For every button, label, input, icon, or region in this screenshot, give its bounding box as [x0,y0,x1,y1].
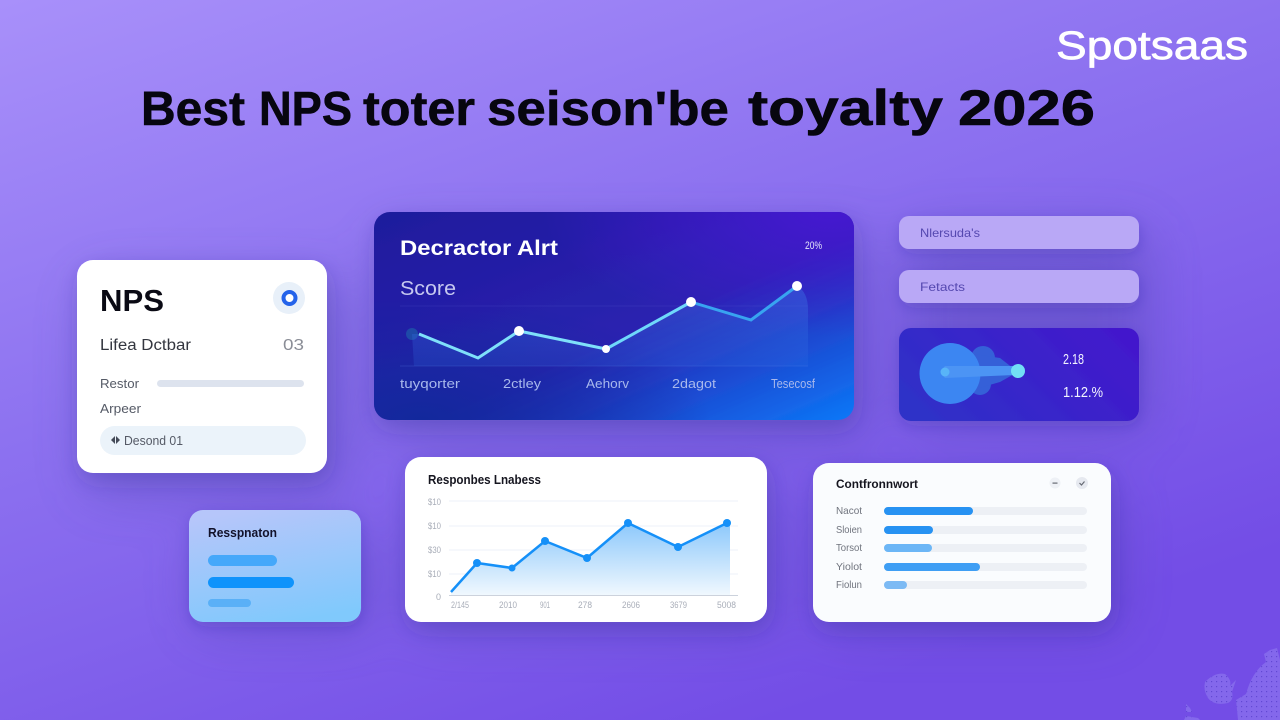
title: toyalty [748,80,943,136]
bar 3 [208,599,251,607]
row: Nacot: Nacot [836,505,862,517]
panel: Contfronnwort bars [813,463,1111,622]
panel: Resspnaton card [189,510,361,622]
line chart: score [406,281,808,366]
row: Nacot [836,505,1087,517]
row: Fiolun: Fiolun [836,579,862,591]
row: Yiolot: Yiolot [836,561,862,573]
x axis labels: 2ctley [503,377,542,391]
title: NPS [259,83,352,136]
x axis labels: 5008 [717,600,736,610]
title: toter [363,83,475,136]
icon: target ring [273,282,305,314]
row bar [157,380,304,387]
icon: minus [1050,478,1060,488]
title: 2026 [958,80,1095,136]
logo: Spotsaas: Spotsaas [1056,24,1248,68]
row: Sloien: Sloien [836,524,862,536]
area line chart [449,519,738,596]
x axis labels: Aehorv [586,377,630,391]
x axis labels: Tesecosf [771,377,815,391]
stat 2: 1.12.% [1063,384,1103,401]
y axis labels: $10 [428,521,441,531]
pill: Desond 01 [100,426,306,455]
row: Fiolun [836,579,1087,591]
x axis labels: 2dagot [672,377,717,391]
row label: Restor: Restor [100,376,140,391]
row: Yiolot [836,561,1087,573]
chart heading: Responbes Lnabess [428,473,541,487]
NPS heading: NPS [100,283,164,318]
x axis labels: 2606 [622,600,640,610]
row label: Arpeer: Arpeer [100,401,142,416]
bar 2 [208,577,294,588]
metric label: Lifea Dctbar [100,337,191,354]
y axis labels [428,497,441,602]
panel: NPS card [77,260,327,473]
y axis labels: $10 [428,569,441,579]
x axis labels: 2/145 [451,600,469,610]
pill: Nlersuda's: Nlersuda's [920,226,980,240]
x axis labels: 2010 [499,600,517,610]
x axis labels: 278 [578,600,592,610]
y axis labels: 0 [436,592,441,602]
panel: Decractor Alrt chart [374,212,854,420]
title: Best [141,83,245,136]
y axis labels: $30 [428,545,441,555]
pill: Desond 01: Desond 01 [124,433,183,448]
title: seison'be [487,83,729,136]
x axis labels: tuyqorter [400,377,460,391]
row: Sloien [836,524,1087,536]
row: Torsot [836,542,1087,554]
panel heading: Decractor Alrt [400,237,558,260]
pill: Fetacts [899,270,1139,303]
pill: Fetacts: Fetacts [920,280,965,294]
metric value: 03 [283,337,304,354]
icon: check [1076,477,1088,489]
panel heading: Contfronnwort [836,479,918,491]
panel: Responbes Lnabess chart [405,457,767,622]
score label: Score [400,278,456,300]
stat 1: 2.18 [1063,351,1084,368]
row: Torsot: Torsot [836,542,862,554]
x axis labels [451,600,736,610]
y axis labels: $10 [428,497,441,507]
x axis labels: 3679 [670,600,687,610]
panel value: 20% [805,240,822,252]
x axis labels [400,377,815,391]
card heading: Resspnaton [208,526,277,540]
panel: gauge stats [899,328,1139,421]
x axis labels: 901 [540,600,550,610]
bar 1 [208,555,277,566]
icon: blue orb [920,343,1025,404]
pill: Nlersuda's [899,216,1139,249]
title [141,80,1095,136]
